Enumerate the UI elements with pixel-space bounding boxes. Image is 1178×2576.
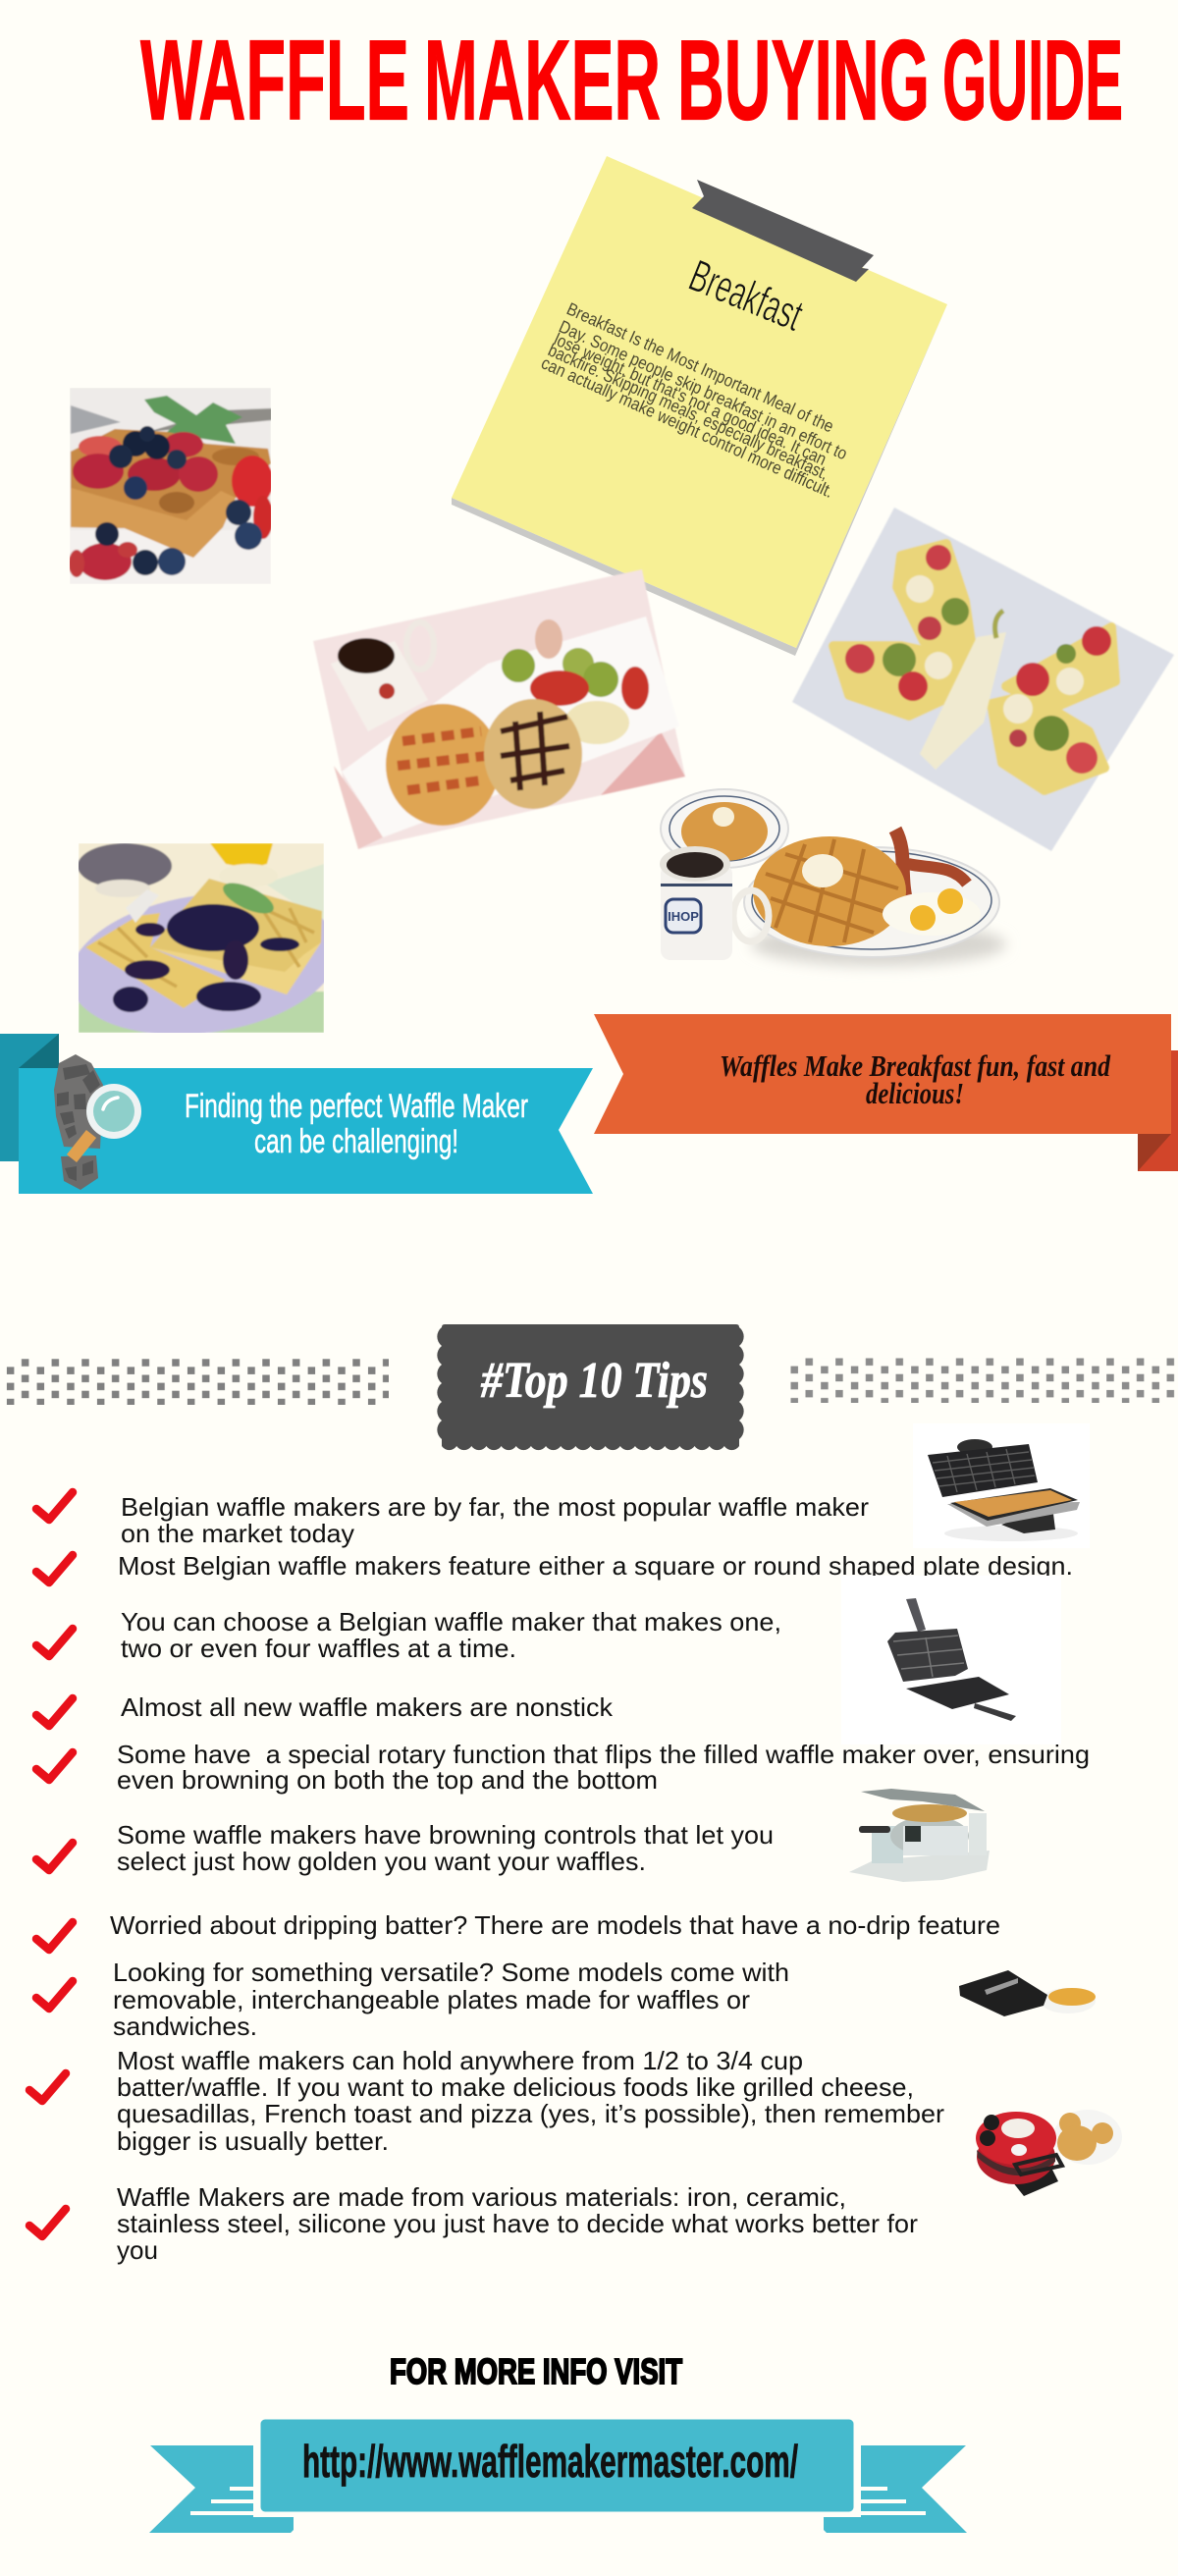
tip 5: Some have a special rotary function that flips the filled waffle maker over, ensuring bbox=[117, 1740, 1090, 1769]
icon: shoe sole with magnifying glass bbox=[54, 1054, 141, 1190]
waffle maker 4: black with mickey waffles bbox=[959, 1970, 1096, 2016]
note shadow edge bbox=[452, 304, 947, 656]
banner stripes bbox=[190, 2487, 926, 2515]
tip 1: Belgian waffle makers are by far, the most popular waffle maker bbox=[121, 1492, 869, 1522]
note paper bbox=[452, 156, 947, 648]
ribbon text: Finding the perfect Waffle Maker bbox=[185, 1088, 528, 1125]
footer heading: FOR MORE INFO VISIT bbox=[390, 2351, 682, 2391]
tip 1 bbox=[36, 1492, 869, 1548]
tip 7 bbox=[36, 1910, 1000, 1950]
ribbon body bbox=[594, 1014, 1171, 1134]
ribbon text: Waffles Make Breakfast fun, fast and bbox=[720, 1048, 1110, 1083]
tip 9: Most waffle makers can hold anywhere from 1/2 to 3/4 cup bbox=[117, 2046, 803, 2075]
note heading: Breakfast bbox=[682, 249, 810, 341]
ribbon text: delicious! bbox=[866, 1076, 964, 1110]
tip 5: even browning on both the top and the bottom bbox=[117, 1765, 658, 1795]
title: BUYING bbox=[677, 16, 930, 143]
tip 8 bbox=[36, 1958, 789, 2041]
tip 6: select just how golden you want your waffles. bbox=[117, 1847, 646, 1876]
tape bbox=[692, 180, 874, 282]
tip 6 bbox=[36, 1820, 774, 1876]
tip 10: stainless steel, silicone you just have to decide what works better for bbox=[117, 2209, 918, 2238]
product box and waffle maker 2 bbox=[841, 1576, 1061, 1744]
title: WAFFLE bbox=[140, 16, 409, 143]
tip 9: batter/waffle. If you want to make delicious foods like grilled cheese, bbox=[117, 2072, 914, 2102]
pattern: left dotted band bbox=[6, 1359, 389, 1405]
ribbon text: can be challenging! bbox=[254, 1123, 458, 1160]
banner left tail bbox=[149, 2445, 294, 2533]
tip 5 bbox=[36, 1740, 1090, 1795]
tip 8: removable, interchangeable plates made for waffles or bbox=[113, 1985, 750, 2014]
note body text: lose weight, but that's not a good idea. It can bbox=[551, 329, 830, 469]
tip 4: Almost all new waffle makers are nonstick bbox=[121, 1692, 614, 1722]
ribbon fold bbox=[1138, 1050, 1178, 1171]
note body text: Breakfast Is the Most Important Meal of the bbox=[563, 298, 836, 436]
tip 2: Most Belgian waffle makers feature either a square or round shaped plate design. bbox=[118, 1551, 1073, 1581]
url text: http://www.wafflemakermaster.com/ bbox=[302, 2436, 798, 2487]
tip 1: on the market today bbox=[121, 1519, 354, 1548]
product box and waffle maker 1 bbox=[913, 1423, 1090, 1548]
tip 3: You can choose a Belgian waffle maker that makes one, bbox=[121, 1607, 781, 1637]
banner body bbox=[259, 2418, 855, 2513]
tip 10: Waffle Makers are made from various materials: iron, ceramic, bbox=[117, 2182, 846, 2212]
tip 10: you bbox=[117, 2235, 158, 2265]
tip 3: two or even four waffles at a time. bbox=[121, 1634, 516, 1663]
photo: waffles on white plate with coffee bbox=[313, 569, 685, 849]
tip 6: Some waffle makers have browning controls that let you bbox=[117, 1820, 774, 1850]
title: MAKER bbox=[424, 16, 661, 143]
heading: top 10 tips: #Top 10 Tips bbox=[480, 1353, 708, 1409]
panel: breakfast sticky note bbox=[452, 156, 947, 656]
note body text: can actually make weight control more difficult. bbox=[538, 352, 836, 502]
ribbon: waffles make breakfast fun bbox=[594, 1014, 1178, 1171]
photo: waffles with blueberry sauce bbox=[79, 843, 324, 1033]
pattern: right dotted band bbox=[790, 1358, 1178, 1403]
waffle maker 5: red mickey bbox=[976, 2110, 1122, 2196]
tip 9: bigger is usually better. bbox=[117, 2126, 389, 2156]
ribbon text bbox=[185, 1088, 528, 1160]
waffle maker 3: rotary bbox=[849, 1789, 990, 1882]
heading: top 10 tips bbox=[437, 1324, 744, 1450]
tip 8: sandwiches. bbox=[113, 2012, 257, 2041]
ribbon: finding the perfect waffle maker bbox=[0, 1034, 593, 1194]
tip 9 bbox=[29, 2046, 944, 2156]
note body text: backfire. Skipping meals, especially breakfast, bbox=[545, 340, 831, 484]
tip 9: quesadillas, French toast and pizza (yes, it’s possible), then remember bbox=[117, 2099, 944, 2128]
photo: waffle with berries bbox=[69, 388, 273, 584]
banner right tail bbox=[824, 2445, 967, 2533]
photo: IHOP waffle breakfast plates bbox=[660, 789, 1006, 966]
tip 10 bbox=[29, 2182, 918, 2265]
ribbon body bbox=[19, 1068, 593, 1194]
note body text: Day. Some people skip breakfast in an effort to bbox=[556, 316, 850, 463]
ribbon text bbox=[720, 1048, 1110, 1110]
tip 3 bbox=[36, 1607, 781, 1663]
ribbon back fold bbox=[0, 1034, 59, 1161]
title bbox=[140, 16, 1123, 143]
photo: butterfly waffle with fruit bbox=[792, 508, 1174, 851]
photo: IHOP waffle breakfast plates: IHOP bbox=[668, 909, 699, 924]
tip 8: Looking for something versatile? Some models come with bbox=[113, 1958, 789, 1987]
tip 7: Worried about dripping batter? There are models that have a no-drip feature bbox=[110, 1910, 1000, 1940]
footer url banner bbox=[149, 2418, 967, 2533]
